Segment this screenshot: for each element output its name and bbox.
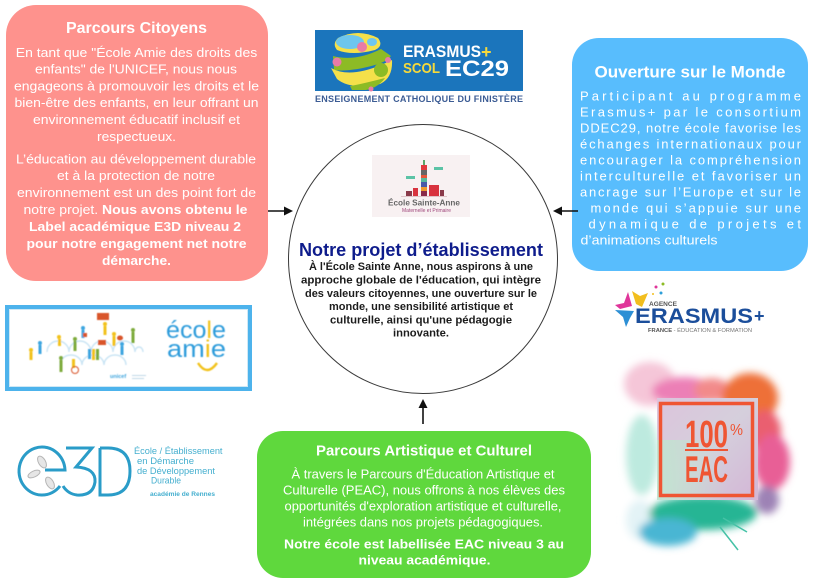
text block: UNICEF commitment: En tant que "École Amie des droits des bbox=[16, 45, 258, 60]
text block: Erasmus programme: Participant au programme bbox=[580, 88, 801, 104]
text block: Erasmus programme: DDEC29, notre école favorise les bbox=[580, 120, 802, 136]
illustration: 100% EAC watercolour badge: % bbox=[730, 422, 743, 439]
text block: UNICEF commitment bbox=[14, 45, 259, 144]
heading: Parcours Citoyens: Parcours Citoyens bbox=[66, 20, 207, 37]
logo: Agence Erasmus+ bbox=[615, 282, 765, 334]
logo: E3D bbox=[19, 446, 223, 498]
text block: project description: approche globale de l'éducation, qui intègre bbox=[301, 274, 541, 286]
logo: E3D: académie de Rennes bbox=[150, 491, 215, 498]
text block: PEAC description: Culturelle (PEAC), nous offrons à nos élèves des bbox=[283, 484, 565, 498]
text block: sustainable development label: Label académique E3D niveau 2 bbox=[29, 219, 241, 234]
text block: UNICEF commitment: engageons à promouvoir les droits et le bbox=[14, 78, 259, 94]
text block: Erasmus programme bbox=[580, 88, 802, 248]
logo: Erasmus+ Scol EC29: + bbox=[481, 42, 492, 62]
heading: Ouverture sur le Monde: Ouverture sur le Monde bbox=[594, 62, 786, 82]
arrow: citizen path to centre bbox=[268, 206, 293, 216]
logo: Erasmus+ Scol EC29: ENSEIGNEMENT CATHOLIQUE DU FINISTÈRE bbox=[315, 94, 523, 104]
text block: UNICEF commitment: environnement éducatif inclusif et bbox=[33, 112, 240, 127]
logo: UNICEF école amie: amie bbox=[167, 336, 226, 363]
text block: sustainable development label: démarche. bbox=[102, 253, 171, 268]
logo: École Sainte-Anne bbox=[372, 155, 470, 217]
text block: PEAC description bbox=[283, 466, 565, 530]
text block: EAC label bbox=[284, 537, 564, 568]
logo: UNICEF école amie: école bbox=[166, 317, 226, 344]
text block: EAC label: niveau académique. bbox=[358, 553, 490, 568]
text block: project description bbox=[301, 260, 541, 340]
text block: Erasmus programme: d’animations culturels bbox=[580, 232, 718, 248]
panel: Parcours Artistique et Culturel bbox=[257, 431, 591, 578]
illustration: 100% EAC watercolour badge bbox=[624, 362, 790, 550]
logo: Agence Erasmus+: FRANCE - ÉDUCATION & FORMATION bbox=[648, 327, 752, 334]
logo: Erasmus+ Scol EC29: SCOL bbox=[403, 60, 440, 77]
panel: Ouverture sur le Monde bbox=[572, 38, 808, 271]
text block: project description: À l'École Sainte Anne, nous aspirons à une bbox=[309, 260, 533, 273]
logo: E3D: Durable bbox=[151, 476, 181, 486]
text block: project description: innovante. bbox=[393, 328, 449, 340]
text block: Erasmus programme: échanges internationaux pour bbox=[580, 136, 802, 152]
arrow: world opening to centre bbox=[553, 206, 578, 216]
text block: sustainable development label: pour notre engagement net notre bbox=[26, 236, 246, 251]
logo: UNICEF école amie bbox=[7, 307, 250, 389]
arrow: arts path to centre bbox=[418, 399, 428, 424]
logo: E3D: de Développement bbox=[137, 466, 215, 477]
text block: project description: monde, une sensibilité artistique et bbox=[329, 301, 513, 313]
logo: Agence Erasmus+: + bbox=[754, 306, 765, 326]
logo: Agence Erasmus+: ERASMUS bbox=[635, 305, 753, 328]
logo: École Sainte-Anne: École Sainte-Anne bbox=[388, 198, 460, 208]
logo: Agence Erasmus+: AGENCE bbox=[649, 301, 678, 308]
logo: E3D: en Démarche bbox=[137, 456, 194, 467]
text block: Erasmus programme: Erasmus+ par le consortium bbox=[580, 104, 801, 120]
illustration: 100% EAC watercolour badge: EAC bbox=[685, 449, 728, 490]
text block: project description: des valeurs citoyennes, une ouverture sur le bbox=[305, 288, 537, 300]
text block: UNICEF commitment: respectueux. bbox=[97, 129, 176, 144]
logo: UNICEF école amie: unicef bbox=[110, 374, 126, 380]
text block: Erasmus programme: interculturelle et favoriser un bbox=[580, 168, 801, 184]
text block: EAC label: Notre école est labellisée EAC niveau 3 au bbox=[284, 537, 564, 552]
text block: sustainable development label bbox=[16, 152, 256, 268]
text block: Erasmus programme: dynamique de projets et bbox=[588, 216, 801, 232]
text block: sustainable development label: et à la protection de notre bbox=[57, 168, 215, 183]
text block: sustainable development label: notre projet. Nous avons obtenu le bbox=[24, 202, 248, 217]
text block: sustainable development label: L’éducation au développement durable bbox=[16, 152, 256, 166]
text block: project description: culturelle, ainsi qu'une pédagogie bbox=[330, 314, 512, 326]
text block: UNICEF commitment: bien-être des enfants, en leur offrant un bbox=[14, 95, 258, 110]
logo: Erasmus+ Scol EC29: EC29 bbox=[445, 56, 509, 81]
text block: sustainable development label: environnement est un des point fort de bbox=[17, 185, 256, 200]
central circle: Notre projet d'établissement bbox=[288, 124, 558, 394]
text block: UNICEF commitment: enfants" de l'UNICEF, nous nous bbox=[35, 62, 237, 76]
text block: PEAC description: À travers le Parcours d'Éducation Artistique et bbox=[292, 466, 555, 482]
text block: Erasmus programme: monde qui s’appuie sur une bbox=[590, 200, 801, 216]
logo: École Sainte-Anne: Maternelle et Primaire bbox=[402, 208, 451, 214]
logo: Erasmus+ Scol EC29 bbox=[315, 30, 523, 104]
panel: Parcours Citoyens bbox=[6, 5, 268, 281]
heading: Notre projet d'établissement: Notre projet d’établissement bbox=[299, 239, 543, 260]
text block: PEAC description: opportunités d'exploration artistique et culturelle, bbox=[284, 500, 562, 514]
text block: PEAC description: intégrées dans nos projets pédagogiques. bbox=[303, 516, 543, 530]
text block: Erasmus programme: encourager la compréhension bbox=[580, 152, 801, 168]
illustration: 100% EAC watercolour badge: 100 bbox=[685, 414, 728, 456]
text block: Erasmus programme: ancrage sur l’Europe et sur le bbox=[580, 184, 801, 200]
logo: Erasmus+ Scol EC29: ERASMUS bbox=[403, 42, 481, 61]
logo: E3D: École / Établissement bbox=[134, 446, 223, 457]
heading: Parcours Artistique et Culturel: Parcours Artistique et Culturel bbox=[316, 443, 532, 460]
